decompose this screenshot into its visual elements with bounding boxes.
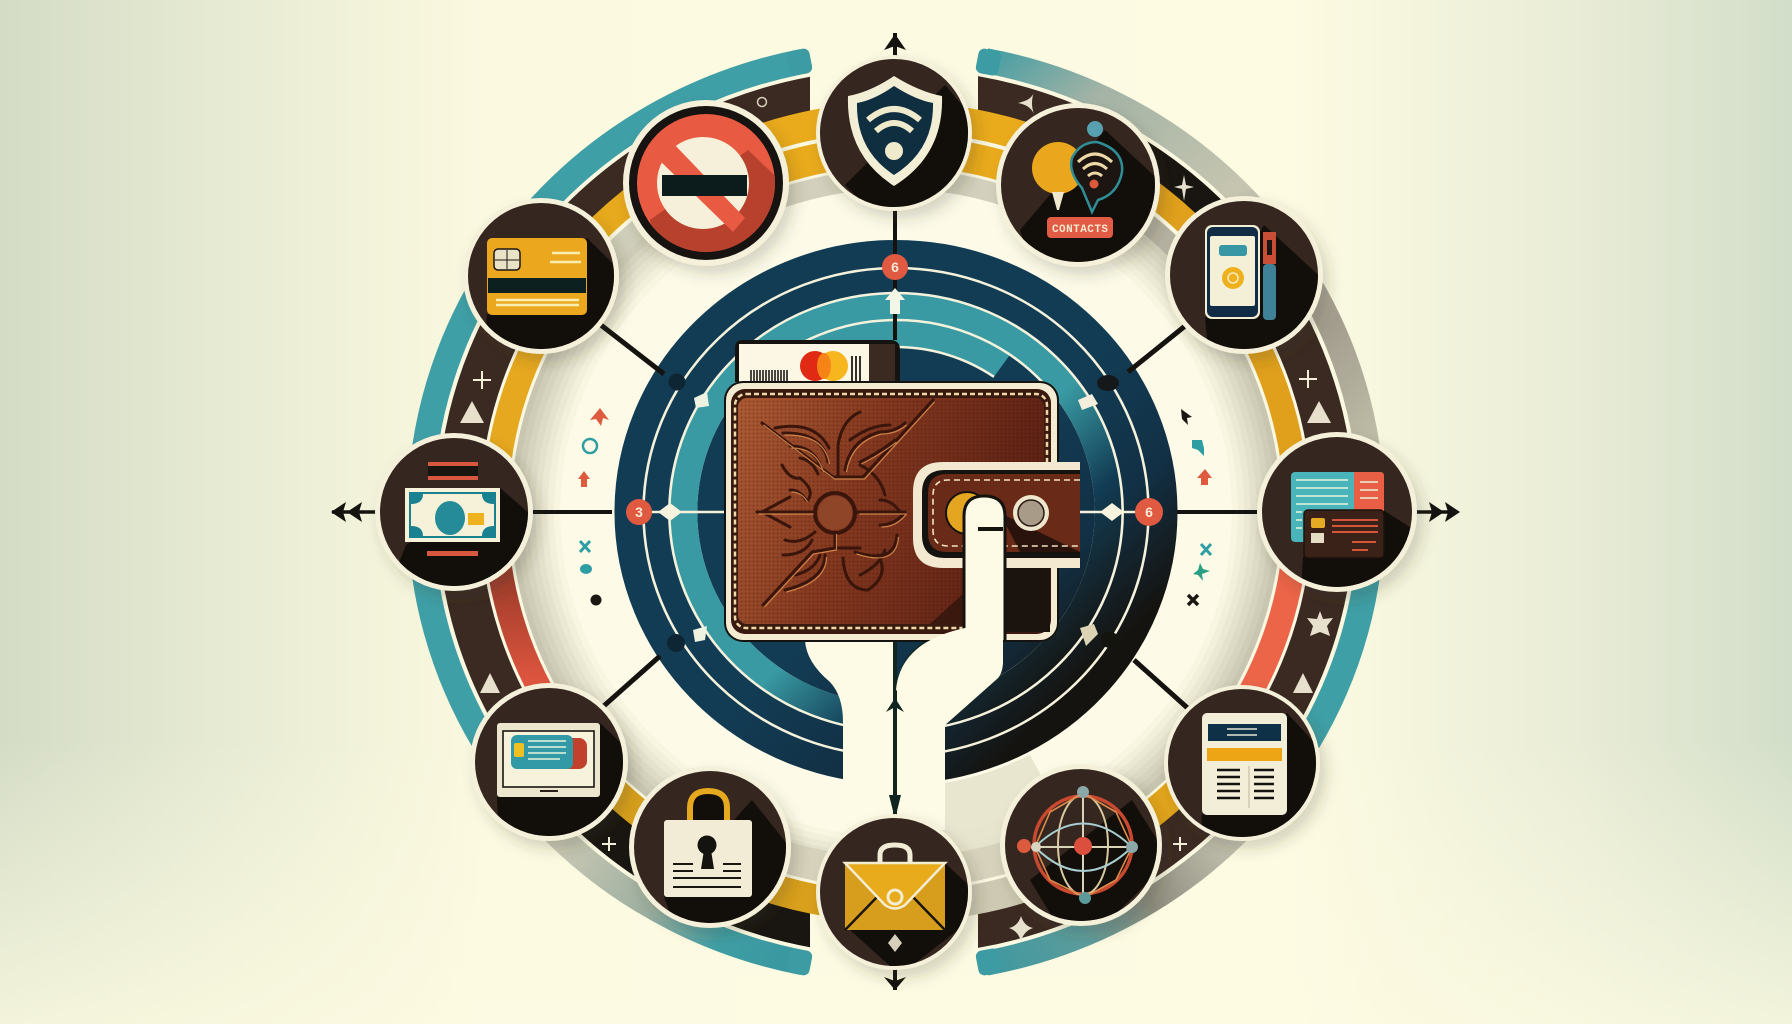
medallion: wifi bulb contacts	[996, 103, 1180, 290]
clasp snap	[946, 492, 988, 534]
outer brown bands	[436, 68, 1356, 956]
icon: screen with card	[497, 723, 600, 797]
icon: money note	[405, 462, 500, 556]
icon: bulb and signal: CONTACTS	[1052, 224, 1108, 236]
numbered red badges: 3	[635, 504, 643, 520]
medallion: network globe	[1000, 764, 1170, 930]
icon: phone	[1205, 225, 1276, 320]
wallet body	[724, 381, 1059, 642]
icon: envelope	[845, 845, 945, 952]
hand silhouette	[805, 497, 1003, 830]
coloured arc segments	[478, 108, 1314, 916]
medallion: article page	[1164, 685, 1340, 860]
icon: globe network	[1017, 786, 1138, 904]
grey inner band	[513, 142, 1279, 882]
medallion: shield wifi	[816, 55, 1000, 220]
outer segmented ring	[513, 142, 1279, 882]
concentric navy target rings	[629, 254, 1163, 770]
medallion: envelope	[816, 814, 990, 975]
icon: bulb and signal	[1032, 121, 1122, 238]
medallion: laptop card	[470, 683, 640, 855]
wallet card	[735, 340, 900, 384]
icon: lock	[664, 791, 752, 897]
medallion: id cards	[1257, 432, 1430, 610]
medallion: prohibition sign	[623, 100, 790, 270]
card barcode and logo	[751, 351, 860, 382]
small band marks	[460, 92, 1333, 941]
medallion: padlock	[629, 766, 800, 940]
icon: document	[1202, 713, 1287, 815]
outer teal bands	[420, 52, 1372, 972]
icon: teal card	[1291, 472, 1384, 558]
medallion: banknote	[374, 433, 545, 604]
hub arrows and connectors	[331, 33, 1460, 990]
embossed emblem	[757, 400, 933, 605]
wallet lower right shadow	[1003, 568, 1050, 632]
pressing finger	[896, 496, 1005, 725]
wallet clasp flap	[913, 462, 1080, 568]
numbered red badges	[626, 254, 1163, 526]
icon: shield	[848, 76, 942, 186]
medallion: smartphone	[1165, 196, 1340, 370]
small scattered glyphs	[578, 408, 1212, 606]
numbered red badges: 6	[891, 259, 899, 275]
icon: card	[487, 238, 587, 315]
medallion: gold credit card	[462, 198, 631, 368]
numbered red badges: 6	[1145, 504, 1153, 520]
teal band rounded ends	[786, 48, 1002, 976]
